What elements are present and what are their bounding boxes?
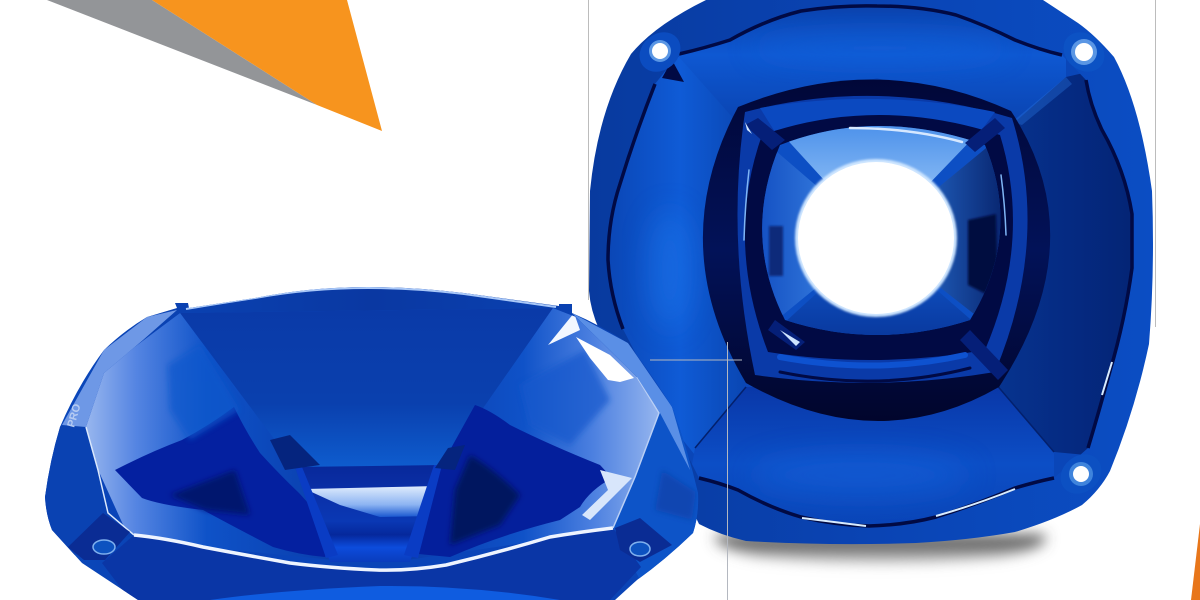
mounting hole tabs	[632, 24, 1112, 502]
right mounting screw	[615, 518, 672, 562]
inner square dark band	[745, 115, 1013, 360]
left wing blue patch	[168, 345, 240, 440]
outer rim of side view	[40, 280, 705, 600]
left mounting screw	[68, 513, 130, 560]
soft shadow beneath front-view horn	[715, 535, 1045, 562]
front-view blue chrome horn	[580, 0, 1170, 560]
bowl interior	[80, 300, 670, 580]
right wing blue patch	[542, 349, 612, 446]
throat reflection bits	[270, 435, 320, 470]
top lip highlight	[186, 288, 556, 309]
inner square dark ring	[703, 79, 1050, 421]
dark wedge near top-left tab	[662, 64, 684, 82]
highlight streaks	[744, 128, 1006, 381]
left and right pale shoulder	[62, 310, 177, 427]
short grey guide lines over the horn	[650, 342, 742, 600]
orange corner accent, bottom right	[1191, 524, 1200, 600]
right wing	[407, 308, 665, 560]
outer rim	[580, 0, 1170, 560]
right dark reflection	[408, 405, 612, 557]
white throat streak	[310, 486, 427, 517]
lip highlight	[134, 528, 613, 570]
horn body with four panels	[600, 0, 1140, 530]
panel seam lines	[695, 383, 1054, 452]
funnel throat	[762, 126, 1000, 335]
back wall	[180, 308, 553, 467]
dark groove between rim and body	[608, 6, 1132, 526]
throat bands	[302, 465, 434, 560]
thin grey guide lines	[588, 0, 1156, 327]
right wing white highlights	[576, 337, 634, 382]
corner joint glints	[745, 122, 800, 346]
orange and grey corner triangles	[47, 0, 382, 131]
left dark reflection	[115, 407, 329, 557]
inner square blue band	[737, 96, 1028, 383]
corner joints of inner square	[745, 118, 1008, 380]
white groove glints	[802, 362, 1112, 526]
embossed brand text: PRO	[65, 402, 84, 429]
side-view blue chrome horn	[40, 280, 705, 600]
central white opening	[795, 159, 957, 317]
wing seam lines	[295, 467, 338, 558]
front lower band	[102, 528, 641, 600]
left wing	[80, 313, 334, 560]
